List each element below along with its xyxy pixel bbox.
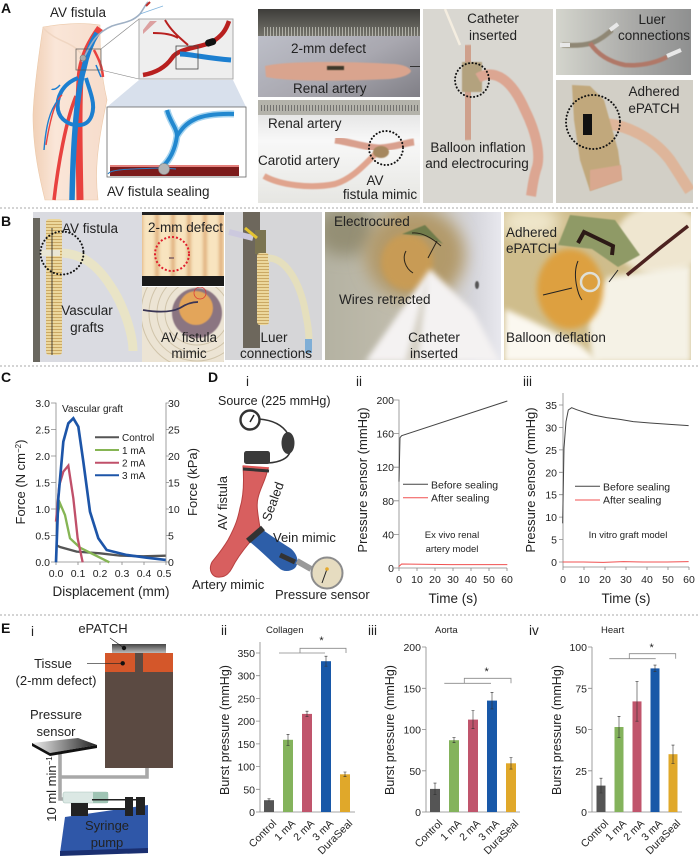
panel label C: C — [1, 369, 11, 385]
legend: 3 mA — [122, 471, 146, 482]
label: Luer connections: connections — [618, 28, 690, 43]
chart: aorta burst pressure: 2 mA — [457, 818, 483, 843]
chart: collagen burst pressure: 50 — [243, 784, 255, 796]
chart: in vitro graft pressure: After sealing — [603, 494, 662, 506]
chart: in vitro graft pressure: Pressure sensor (mmHg) — [523, 407, 538, 553]
y tick labels: 1.5 — [35, 478, 50, 490]
chart: force vs displacement — [13, 398, 200, 599]
chart: collagen burst pressure: 2 mA — [291, 818, 317, 843]
legend: 2 mA — [122, 458, 146, 470]
chart: in vitro graft pressure: 0 — [560, 574, 566, 586]
chart: collagen burst pressure: 150 — [237, 739, 255, 751]
label: Pressure sensor: Pressure — [30, 707, 82, 722]
chart: heart burst pressure: Heart — [601, 625, 625, 636]
y tick labels: 0.0 — [35, 557, 50, 569]
1 mA curve — [56, 503, 109, 562]
chart: heart burst pressure: DuraSeal — [644, 818, 683, 857]
chart: force vs displacement: Vascular graft — [62, 404, 123, 415]
chart: ex vivo renal artery pressure: After sealing — [431, 492, 490, 504]
chart: in vitro graft pressure: 50 — [662, 574, 674, 586]
label: AV fistula: AV fistula — [62, 221, 119, 236]
y tick labels: 2.5 — [35, 424, 50, 436]
legend: Control — [122, 433, 154, 444]
right tick labels: 25 — [168, 424, 180, 436]
chart: in vitro graft pressure: Before sealing — [603, 482, 670, 494]
label: Artery mimic: Artery mimic — [192, 577, 265, 592]
label: 2-mm defect: 2-mm defect — [148, 220, 223, 235]
y tick labels: 3.0 — [35, 398, 50, 410]
chart: heart burst pressure: 75 — [575, 683, 587, 695]
chart: collagen burst pressure: 300 — [237, 671, 255, 683]
chart: aorta burst pressure: 3 mA — [476, 818, 502, 843]
chart: in vitro graft pressure: 35 — [545, 400, 557, 412]
chart: collagen burst pressure: 0 — [249, 807, 255, 819]
diagram: AV fistula pressure setup — [210, 410, 342, 588]
chart: aorta burst pressure: * — [485, 666, 490, 678]
label: Pressure sensor: Pressure sensor — [275, 587, 370, 602]
chart: collagen burst pressure: Burst pressure (mmHg) — [218, 665, 232, 795]
label: Vascular grafts: grafts — [70, 320, 104, 335]
label: Catheter inserted: inserted — [410, 346, 458, 361]
chart: force vs displacement: Force (N cm — [13, 453, 28, 524]
label: Adhered ePATCH: ePATCH — [506, 241, 557, 256]
subpanel iv: iv — [529, 623, 539, 638]
photo: AV fistula mimic interior — [142, 287, 224, 362]
label: Syringe pump: Syringe — [85, 818, 129, 833]
label: AV fistula mimic: AV — [366, 173, 384, 188]
photo: electrocured view — [325, 212, 501, 360]
right tick labels: 15 — [168, 478, 180, 490]
chart: in vitro graft pressure: 30 — [545, 422, 557, 434]
chart: ex vivo renal artery pressure: Ex vivo renal — [425, 530, 479, 541]
right tick labels: 10 — [168, 504, 180, 516]
photo: Luer connections — [556, 9, 691, 75]
subpanel iii: iii — [523, 374, 532, 389]
label: Carotid artery: Carotid artery — [258, 153, 340, 168]
chart: in vitro graft pressure: 15 — [545, 490, 557, 502]
chart: heart burst pressure: 50 — [575, 724, 587, 736]
label: flow rate: 10 ml min — [44, 765, 59, 822]
chart: ex vivo renal artery pressure: Time (s) — [428, 591, 478, 606]
photo: vascular grafts — [33, 212, 142, 362]
label: Catheter inserted: Catheter — [408, 330, 460, 345]
label: Vascular grafts: Vascular — [61, 303, 113, 318]
x tick labels: 0.1 — [71, 568, 85, 580]
chart: force vs displacement: −2 — [14, 443, 23, 453]
label: Adhered ePATCH: Adhered — [506, 225, 557, 240]
chart: ex vivo renal artery pressure: artery model — [426, 544, 478, 555]
chart: aorta burst pressure: 150 — [403, 683, 421, 695]
chart: heart burst pressure: 3 mA — [639, 818, 665, 843]
chart: heart burst pressure: 100 — [569, 642, 587, 654]
chart: collagen burst pressure: 200 — [237, 716, 255, 728]
chart: collagen burst pressure: Control — [247, 818, 279, 850]
photo: 2-mm defect renal artery — [258, 9, 420, 97]
chart: aorta burst pressure: Burst pressure (mmHg) — [383, 665, 397, 795]
chart: ex vivo renal artery pressure: 120 — [376, 462, 394, 474]
chart: aorta burst pressure: 200 — [403, 642, 421, 654]
chart: in vitro graft pressure: Time (s) — [602, 591, 650, 606]
chart: collagen burst pressure: Collagen — [266, 625, 304, 636]
label: Renal artery: Renal artery — [293, 81, 367, 96]
chart: ex vivo renal artery pressure: 30 — [447, 574, 459, 586]
label: Wires retracted: Wires retracted — [339, 292, 431, 307]
chart: heart burst pressure: Burst pressure (mmHg) — [550, 665, 564, 795]
chart: aorta burst pressure — [383, 625, 521, 857]
label: Pressure sensor: sensor — [36, 724, 76, 739]
photo: AV fistula mimic — [258, 100, 420, 203]
y tick labels: 1.0 — [35, 504, 50, 516]
chart: aorta burst pressure: 0 — [415, 807, 421, 819]
control curve — [56, 545, 166, 556]
chart: collagen burst pressure: * — [319, 635, 324, 647]
panel label B: B — [1, 213, 11, 229]
label: ePATCH: ePATCH — [78, 621, 128, 636]
chart: ex vivo renal artery pressure: 0 — [396, 574, 402, 586]
right tick labels: 0 — [168, 557, 174, 569]
chart: in vitro graft pressure: In vitro graft model — [589, 530, 667, 541]
label: Balloon inflation and electrocuring: and electrocuring — [425, 156, 529, 171]
chart: ex vivo renal artery pressure: 0 — [388, 563, 394, 575]
chart: aorta burst pressure: Control — [413, 818, 445, 850]
panel label A: A — [1, 0, 11, 16]
chart: aorta burst pressure: 100 — [403, 724, 421, 736]
diagram: burst pressure setup — [32, 638, 173, 856]
x tick labels: 0.4 — [137, 568, 151, 580]
chart: collagen burst pressure: DuraSeal — [316, 818, 355, 857]
chart: heart burst pressure: 1 mA — [603, 818, 629, 843]
subpanel ii: ii — [221, 623, 227, 638]
label: Electrocured: Electrocured — [334, 214, 410, 229]
label: Catheter inserted: inserted — [469, 28, 517, 43]
legend: 1 mA — [122, 446, 146, 457]
chart: ex vivo renal artery pressure: 200 — [376, 395, 394, 407]
title: AV fistula: AV fistula — [50, 5, 107, 20]
chart: heart burst pressure: 25 — [575, 766, 587, 778]
chart: in vitro graft pressure: 20 — [599, 574, 611, 586]
x tick labels: 0.0 — [49, 568, 63, 580]
chart: in vitro graft pressure: 20 — [545, 467, 557, 479]
label: Tissue: (2-mm defect) — [16, 673, 96, 688]
label: flow rate: −1 — [45, 756, 54, 765]
chart: ex vivo renal artery pressure: 40 — [382, 529, 394, 541]
chart: heart burst pressure: 0 — [581, 807, 587, 819]
chart: aorta burst pressure: 50 — [409, 766, 421, 778]
chart: force vs displacement: ) — [13, 440, 28, 444]
chart: ex vivo renal artery pressure: 10 — [411, 574, 423, 586]
label: Source: Source (225 mmHg) — [218, 394, 331, 408]
chart: ex vivo renal artery pressure: Pressure sensor (mmHg) — [355, 407, 370, 553]
chart: aorta burst pressure: 1 mA — [438, 818, 464, 843]
chart: force vs displacement: Force (kPa) — [185, 448, 200, 516]
photo: grafts with Luer connections — [225, 212, 322, 360]
subpanel iii: iii — [368, 623, 377, 638]
chart: collagen burst pressure: 1 mA — [272, 818, 298, 843]
chart: collagen burst pressure: 100 — [237, 762, 255, 774]
inset: AV fistula sealing close-up — [107, 107, 246, 177]
chart: in vitro graft pressure: 40 — [641, 574, 653, 586]
label: Luer connections: Luer — [260, 330, 288, 345]
label: AV fistula mimic: mimic — [171, 346, 207, 361]
label: Luer connections: connections — [240, 346, 312, 361]
label: Balloon deflation: Balloon deflation — [506, 330, 606, 345]
chart: ex vivo renal artery pressure: 80 — [382, 496, 394, 508]
right tick labels — [168, 398, 180, 569]
photo: adhered ePATCH — [556, 80, 693, 203]
legend — [95, 433, 154, 482]
right tick labels: 20 — [168, 451, 180, 463]
caption: AV fistula sealing: AV fistula sealing — [107, 184, 210, 199]
panel label D: D — [208, 369, 218, 385]
chart: in vitro graft pressure: 10 — [578, 574, 590, 586]
chart: ex vivo renal artery pressure: Before sealing — [431, 480, 498, 492]
photo: catheter inserted — [423, 9, 553, 203]
chart: heart burst pressure — [550, 625, 683, 857]
chart: heart burst pressure: Control — [579, 818, 611, 850]
chart: collagen burst pressure — [218, 625, 355, 857]
x tick labels — [49, 568, 171, 580]
chart: in vitro graft pressure: 25 — [545, 445, 557, 457]
chart: collagen burst pressure: 3 mA — [310, 818, 336, 843]
inset: vessel close-up — [139, 19, 233, 79]
3 mA curve — [56, 418, 166, 562]
chart: in vitro graft pressure: 10 — [545, 512, 557, 524]
label: AV fistula mimic: AV fistula — [161, 330, 218, 345]
y tick labels: 2.0 — [35, 451, 50, 463]
chart: force vs displacement: Displacement (mm) — [52, 584, 170, 599]
label: Catheter inserted: Catheter — [467, 11, 519, 26]
chart: heart burst pressure: 2 mA — [621, 818, 647, 843]
chart: in vitro graft pressure: 60 — [683, 574, 695, 586]
label: Adhered ePATCH: Adhered — [628, 84, 680, 99]
right tick labels: 30 — [168, 398, 180, 410]
label: Sealed: Sealed — [259, 480, 287, 523]
chart: aorta burst pressure: Aorta — [435, 625, 458, 636]
label: 2-mm defect: 2-mm defect — [291, 41, 366, 56]
chart: collagen burst pressure: 250 — [237, 693, 255, 705]
label: Renal artery: Renal artery — [268, 116, 342, 131]
chart: in vitro graft pressure: 5 — [551, 535, 557, 547]
label: Balloon inflation and electrocuring: Balloon inflation — [430, 140, 526, 155]
label: AV fistula mimic: fistula mimic — [343, 187, 417, 202]
chart: in vitro graft pressure: 30 — [620, 574, 632, 586]
chart: ex vivo renal artery pressure: 160 — [376, 429, 394, 441]
right tick labels: 5 — [168, 530, 174, 542]
panel label E: E — [1, 620, 10, 636]
photo: adhered ePATCH view — [504, 212, 691, 360]
subpanel i: i — [246, 374, 249, 389]
chart: ex vivo renal artery pressure: 60 — [501, 574, 513, 586]
chart: ex vivo renal artery pressure: 20 — [429, 574, 441, 586]
chart: collagen burst pressure: 350 — [237, 648, 255, 660]
label: AV fistula: AV fistula — [215, 475, 230, 530]
subpanel ii: ii — [356, 374, 362, 389]
label: Syringe pump: pump — [91, 835, 123, 850]
chart: ex vivo renal artery pressure: 40 — [465, 574, 477, 586]
chart: aorta burst pressure: DuraSeal — [482, 818, 521, 857]
x tick labels: 0.2 — [93, 568, 107, 580]
zoom wedge — [107, 80, 246, 107]
chart: in vitro graft pressure: 0 — [551, 557, 557, 569]
chart: ex vivo renal artery pressure: 50 — [483, 574, 495, 586]
chart: ex vivo renal artery pressure — [355, 395, 513, 606]
x tick labels: 0.5 — [157, 568, 171, 580]
subpanel i: i — [31, 624, 34, 639]
x tick labels: 0.3 — [115, 568, 129, 580]
label: Tissue: Tissue — [34, 656, 72, 671]
label: Adhered ePATCH: ePATCH — [628, 101, 680, 116]
chart: heart burst pressure: * — [650, 642, 655, 654]
illustration: leg with AV fistula — [33, 2, 163, 200]
photo: 2-mm defect in graft — [142, 212, 224, 286]
label: Vein mimic: Vein mimic — [273, 530, 336, 545]
y tick labels — [35, 398, 50, 569]
label: Luer connections: Luer — [638, 12, 666, 27]
y tick labels: 0.5 — [35, 530, 50, 542]
chart: in vitro graft pressure — [523, 393, 695, 606]
2 mA curve — [56, 466, 83, 562]
